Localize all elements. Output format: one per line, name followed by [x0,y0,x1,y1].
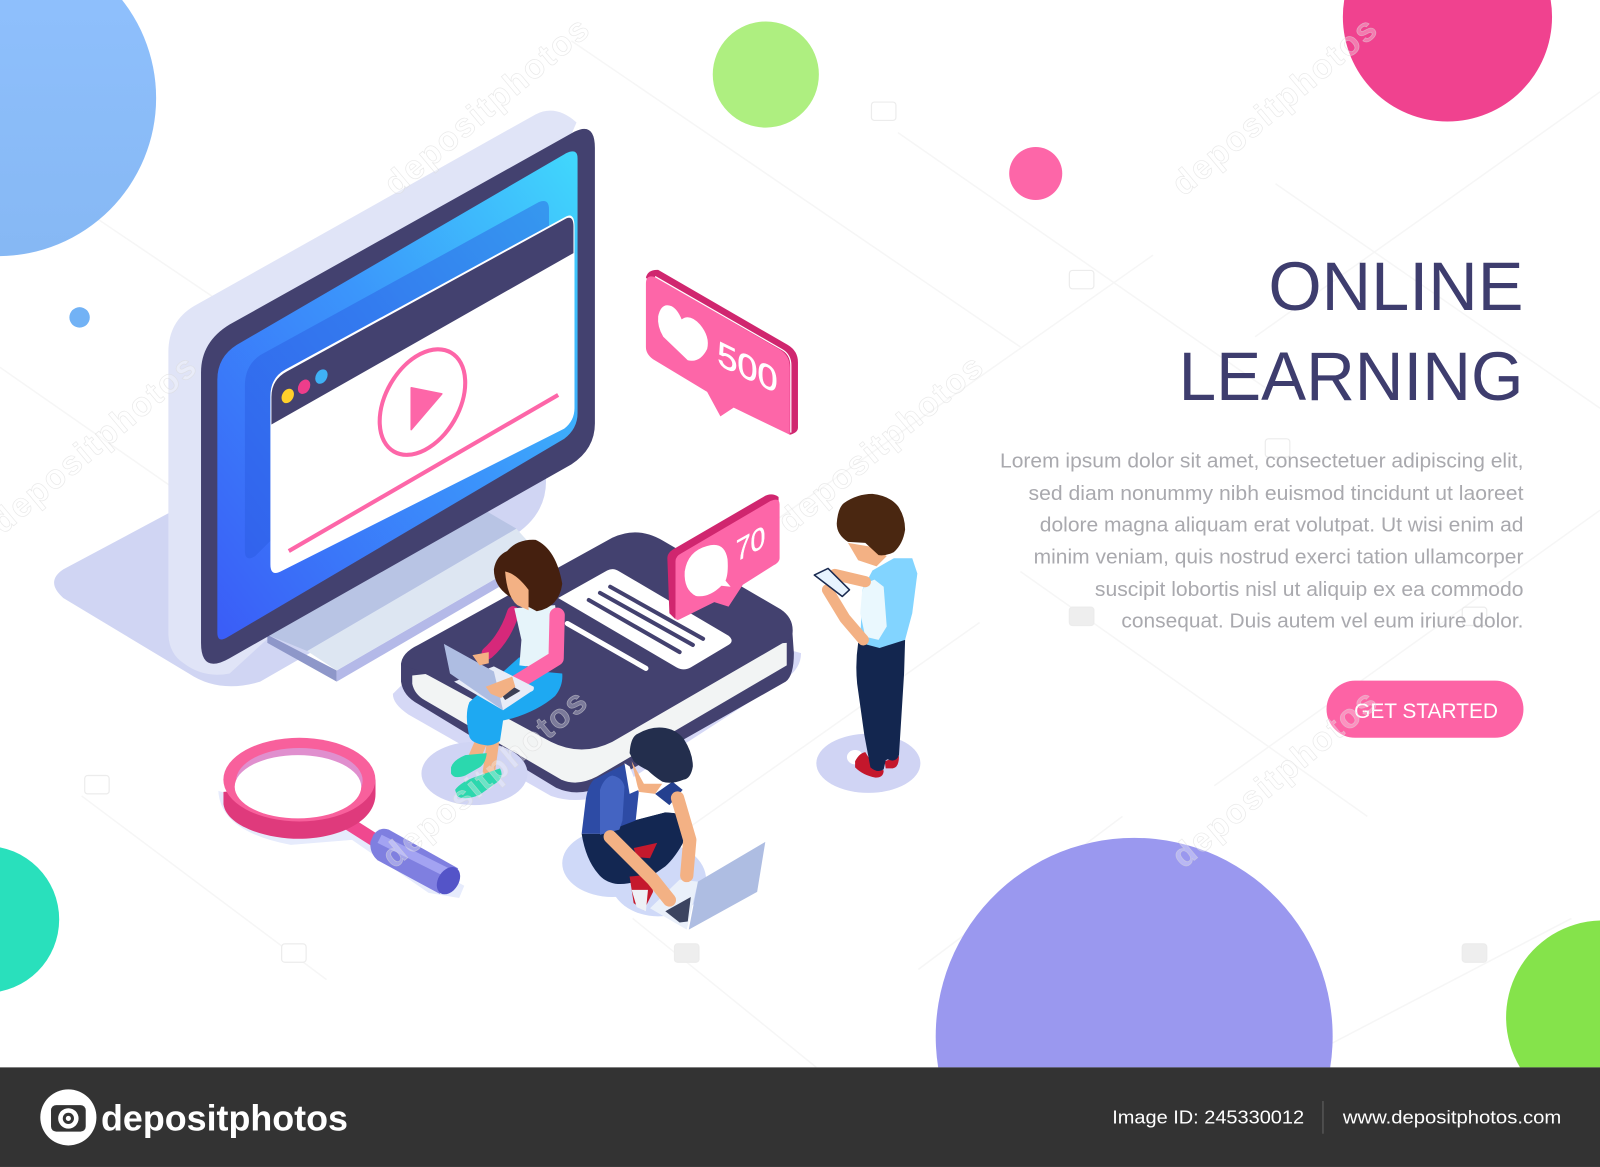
hair [630,727,693,783]
badge face [676,500,780,620]
title: LEARNING [1179,339,1523,415]
keyboard [665,897,691,922]
watermark text [0,11,1384,876]
shoe sole [632,890,648,911]
legs [474,741,493,772]
background circle: small pink [1009,147,1062,200]
body text: consequat. Duis autem vel eum iriure dolor. [1121,611,1523,633]
logo wordmark: depositphotos [101,1099,348,1139]
book white line [567,624,646,668]
watermark text: depositphotos [771,349,990,541]
sleeve [600,776,624,835]
logo icon [40,1089,96,1145]
monitor floor shadow [54,408,546,686]
monitor back panel [168,111,577,675]
handle grip [370,829,458,894]
watermark text: depositphotos [1165,683,1384,876]
face [505,571,529,610]
monitor bezel [201,129,595,664]
icon: play ring [362,334,483,470]
skirt [467,657,562,745]
badge face [646,276,790,435]
shoe halo [847,750,863,764]
background circle: small blue dot [69,307,90,328]
watermark text: depositphotos [375,683,594,876]
body text: minim veniam, quis nostrud exerci tation ullamcorper [1034,546,1524,568]
count 70: 70 [736,518,765,569]
grip end [432,863,465,899]
book back cover [401,612,794,792]
title: ONLINE [1268,249,1523,325]
progress bar [289,395,558,551]
right sleeve [655,782,683,805]
background circle: teal left [0,846,59,993]
window dot: pink [295,377,313,396]
background circle: light blue [0,0,156,256]
rim top [223,738,375,821]
illustration: monitor [54,111,595,686]
arms [828,575,865,640]
shoes [451,753,502,798]
torso [514,605,558,668]
shirt [860,558,917,648]
white tee [634,792,677,820]
laptop screen [689,842,765,930]
shirt [582,763,639,834]
count 500: 500 [717,333,778,401]
body text: suscipit lobortis nisl ut aliquip ex ea commodo [1095,579,1523,601]
seated boy shadow [562,830,706,916]
icon: like badge 500 [646,270,798,435]
shoes [855,752,899,778]
background circle: green bottom right [1506,920,1600,1067]
body text [1000,450,1524,633]
window dot: yellow [279,387,296,405]
left arm [488,612,513,653]
background circle: green top [713,21,819,128]
icon: heart [658,305,708,361]
collar [624,763,639,794]
illustration: seated boy with laptop [562,727,765,930]
illustration: woman with laptop [421,540,562,805]
right arm [516,615,557,683]
image id: Image ID: 245330012 [1112,1106,1304,1127]
footer divider [1322,1101,1323,1134]
face [632,761,662,794]
sleeve [860,580,887,640]
footer bar [0,1067,1600,1167]
pants [856,640,905,771]
monitor screen [217,151,578,639]
paper text lines [589,587,703,652]
rim side [223,780,376,839]
standing boy shadow [816,734,920,793]
icon: speech bubble [685,545,731,596]
watermark text: depositphotos [1165,11,1384,203]
phone [814,568,849,596]
background circle: purple bottom [936,838,1333,1067]
body text: dolore magna aliquam erat volutpat. Ut wisi enim ad [1040,515,1523,537]
woman shadow [421,742,528,805]
magnifier shadow [218,791,464,898]
body text: Lorem ipsum dolor sit amet, consectetuer adipiscing elit, [1000,450,1523,472]
button: get started [1327,681,1523,738]
lens inner [236,748,363,813]
button: get started: GET STARTED [1354,700,1498,723]
watermark camera icons [85,102,1487,962]
title [1179,249,1523,415]
browser window [270,215,574,573]
background circle: magenta top right [1343,0,1552,121]
website: www.depositphotos.com [1342,1106,1561,1127]
book top cover [401,532,793,750]
hair [837,494,905,555]
badge highlight [655,277,791,433]
hands [472,652,515,698]
face [848,543,887,566]
paper on book [558,569,732,669]
hair [494,540,562,611]
illustration: standing boy with phone [814,494,920,793]
laptop base [650,880,698,930]
laptop [444,644,534,710]
pants [582,812,685,884]
illustration: magnifying glass [218,738,465,899]
red shoes [630,843,657,910]
lens glass [235,755,361,818]
illustration: book [393,532,801,800]
icon: comment badge 70 [667,494,780,620]
window shadow [245,201,549,558]
handle stem [347,822,381,844]
book pages [412,643,787,783]
window dot: blue [313,367,330,386]
body text: sed diam nonummy nibh euismod tincidunt ut laoreet [1029,483,1524,505]
badge side [646,270,798,435]
badge side [667,494,779,619]
grip highlight [380,839,453,876]
arms [610,798,690,900]
title bar [271,218,573,425]
monitor stand [267,507,527,682]
book shadow [393,612,801,800]
icon: play triangle [411,388,442,430]
watermark text: depositphotos [377,11,596,203]
